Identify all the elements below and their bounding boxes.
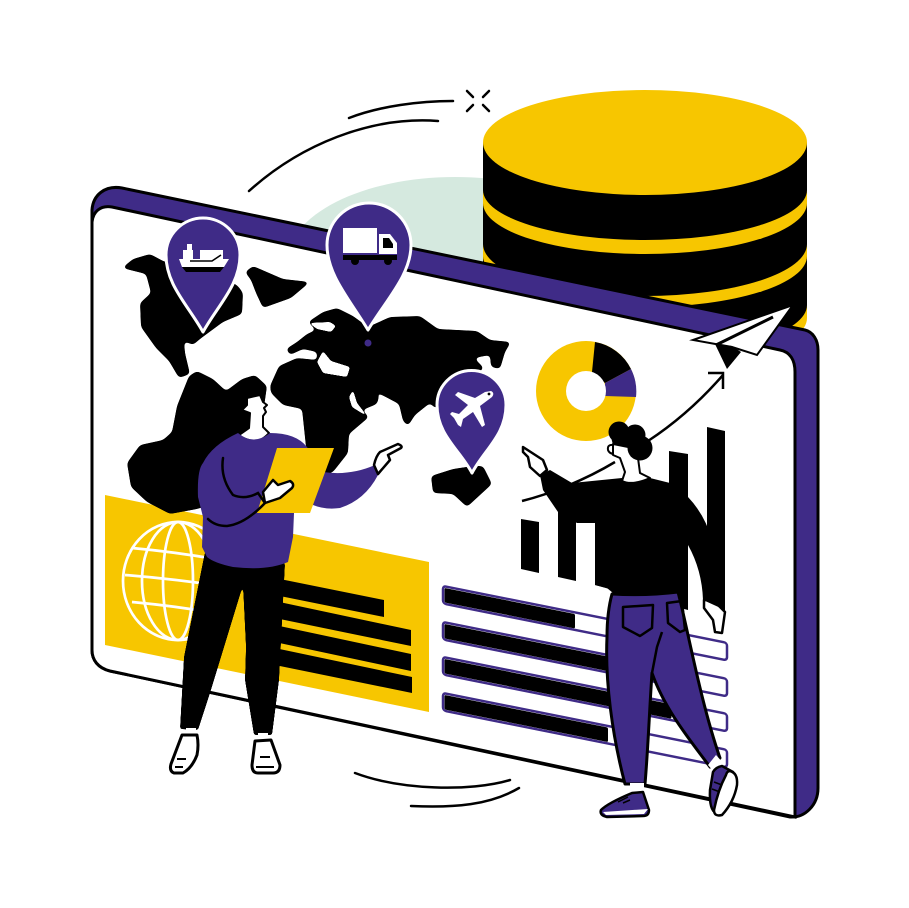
right shoe — [252, 733, 280, 773]
neck and face — [239, 395, 269, 441]
database cylinder — [483, 90, 807, 368]
north america — [122, 254, 243, 378]
jeans — [607, 592, 720, 784]
panel text bars — [270, 577, 412, 693]
woman — [127, 371, 402, 773]
man hair — [608, 422, 652, 460]
screen display — [92, 207, 795, 817]
holding hand — [263, 480, 293, 503]
right shoe purple — [708, 755, 737, 815]
pin: truck — [327, 203, 411, 330]
screen frame — [92, 187, 818, 817]
glasses — [608, 445, 614, 454]
hair — [127, 371, 267, 514]
eurasia and africa — [270, 308, 511, 482]
icon: truck — [343, 228, 397, 265]
pointing hand — [374, 444, 402, 474]
motion lines bottom — [355, 773, 519, 807]
greenland — [245, 266, 310, 308]
progress bars — [443, 586, 727, 767]
sweater — [198, 433, 378, 568]
map sea cut-outs — [309, 322, 368, 417]
tablet — [257, 448, 334, 513]
yellow info panel — [105, 495, 429, 712]
neck — [613, 444, 650, 483]
globe icon — [123, 522, 233, 640]
jeans details — [623, 601, 685, 673]
pin: plane — [437, 371, 506, 473]
icon: ship — [179, 244, 229, 272]
motion lines top — [249, 91, 489, 191]
pin: ship — [166, 218, 240, 332]
man — [523, 422, 737, 817]
background blob — [287, 177, 623, 347]
hand pointing — [523, 447, 547, 476]
donut chart — [536, 341, 636, 441]
left shoe — [170, 728, 198, 773]
trend arrow — [522, 373, 723, 501]
black shirt — [540, 470, 725, 610]
paper plane — [693, 305, 793, 369]
australia — [431, 466, 492, 507]
legs — [180, 552, 285, 735]
hand lowered — [704, 600, 725, 633]
world map — [122, 254, 511, 507]
icon: plane — [450, 391, 493, 427]
sweater arm line — [208, 458, 265, 526]
left shoe purple — [601, 783, 649, 817]
pin dot — [364, 340, 372, 346]
column chart — [521, 427, 725, 612]
